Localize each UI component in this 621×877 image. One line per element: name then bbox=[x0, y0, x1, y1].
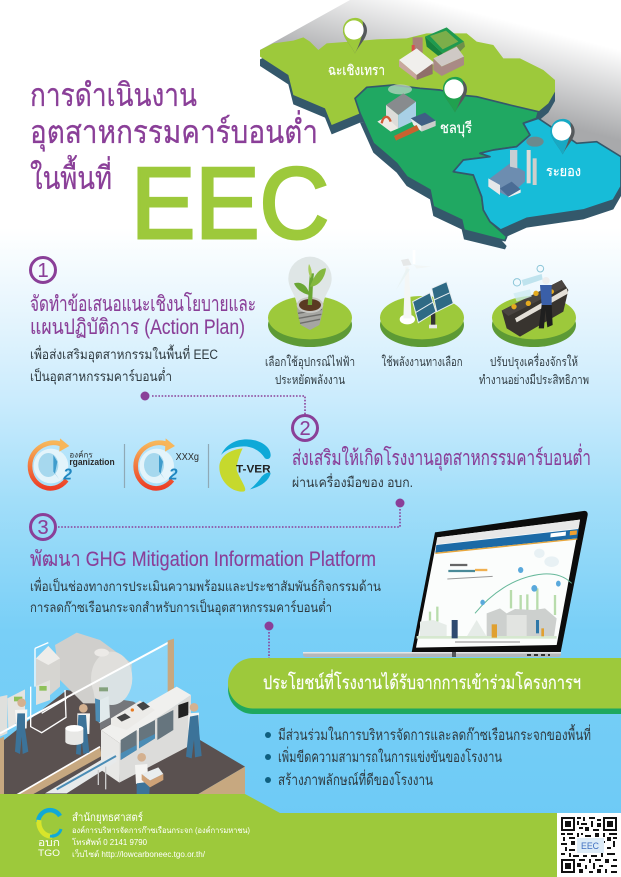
logo: T-VER: T-VER bbox=[236, 464, 271, 476]
map of EEC provinces bbox=[260, 18, 621, 249]
description 3: การลดก๊าซเรือนกระจกสำหรับการเป็นอุตสาหกรรมคาร์บอนต่ำ bbox=[30, 598, 332, 616]
description 1: เป็นอุตสาหกรรมคาร์บอนต่ำ bbox=[30, 367, 172, 385]
section 1: policy and action plan bbox=[30, 258, 256, 385]
worker right bbox=[186, 703, 202, 758]
logo: carbon footprint organization: องค์กร bbox=[69, 449, 93, 459]
title: ในพื้นที่ bbox=[30, 155, 112, 196]
title bbox=[30, 77, 329, 260]
description 2: ผ่านเครื่องมือของ อบก. bbox=[292, 473, 413, 490]
province: Chachoengsao bbox=[260, 33, 555, 125]
caption: energy saving equipment: เลือกใช้อุปกรณ์ไฟฟ้า bbox=[265, 355, 355, 370]
laptop with platform website bbox=[412, 511, 588, 652]
title: อุตสาหกรรมคาร์บอนต่ำ bbox=[30, 110, 318, 152]
icon: factory Chachoengsao bbox=[399, 27, 465, 80]
step number 1 bbox=[30, 258, 56, 282]
icon: pin Chachoengsao bbox=[343, 18, 367, 53]
caption: alternative energy: ใช้พลังงานทางเลือก bbox=[382, 355, 462, 369]
floor edge right bbox=[197, 767, 245, 795]
laptop base bbox=[303, 652, 561, 657]
icon: factory Chon Buri bbox=[377, 84, 436, 141]
benefits list bbox=[265, 724, 591, 789]
heading 3: พัฒนา GHG Mitigation Information Platform bbox=[30, 548, 376, 571]
province: Rayong bbox=[453, 118, 621, 230]
logo: carbon footprint product: 2 bbox=[168, 466, 178, 483]
benefits banner bbox=[228, 658, 621, 714]
heading 1: แผนปฏิบัติการ (Action Plan) bbox=[30, 316, 245, 339]
large tank bbox=[55, 633, 132, 705]
filling machine bbox=[101, 687, 191, 783]
section 3: information platform bbox=[30, 514, 381, 616]
TGO logo bbox=[38, 810, 61, 858]
left post bbox=[0, 737, 4, 795]
logo: carbon footprint product bbox=[136, 438, 199, 488]
QR code bbox=[557, 813, 621, 877]
step number 2 bbox=[292, 416, 318, 440]
glass partition bbox=[0, 639, 174, 795]
small tank and frame bbox=[31, 643, 67, 733]
factory interior illustration bbox=[0, 633, 245, 795]
logo: carbon footprint organization: rganization bbox=[69, 457, 115, 467]
logo: carbon footprint organization: 2 bbox=[62, 466, 72, 483]
caption: energy saving equipment bbox=[265, 355, 355, 387]
label: Rayong: ระยอง bbox=[546, 163, 581, 179]
contact details bbox=[72, 811, 250, 859]
TGO logo: TGO bbox=[38, 848, 60, 858]
contact details: เว็บไซต์ http://lowcarboneec.tgo.or.th/ bbox=[72, 849, 206, 859]
floor bbox=[0, 690, 245, 795]
description 3 bbox=[30, 577, 381, 616]
connector 1 to 2 bbox=[140, 392, 305, 414]
logo: T-VER bbox=[219, 439, 271, 492]
icon: light bulb with seedling bbox=[268, 257, 352, 347]
footer band bbox=[0, 794, 621, 877]
caption: improve machines bbox=[479, 353, 589, 387]
description 3: เพื่อเป็นช่องทางการประเมินความพร้อมและประชาสัมพันธ์กิจกรรมด้าน bbox=[30, 577, 381, 594]
title: การดำเนินงาน bbox=[30, 77, 197, 113]
step number 2: 2 bbox=[299, 418, 311, 440]
contact details: สำนักยุทธศาสตร์ bbox=[72, 811, 143, 824]
low wall bbox=[17, 747, 102, 795]
heading 1: จัดทำข้อเสนอแนะเชิงนโยบายและ bbox=[30, 292, 256, 316]
contact details: โทรศัพท์ 0 2141 9790 bbox=[72, 837, 148, 847]
conveyor belt bbox=[45, 752, 117, 793]
connector 2 to 3 bbox=[57, 498, 404, 527]
icon: efficient machinery bbox=[492, 265, 576, 347]
description 1 bbox=[30, 344, 218, 385]
description 1: เพื่อส่งเสริมอุตสาหกรรมในพื้นที่ EEC bbox=[30, 344, 218, 363]
caption: improve machines: ปรับปรุงเครื่องจักรให้ bbox=[490, 353, 578, 370]
connector 3 to benefits bbox=[264, 622, 274, 658]
icon: pin Chon Buri bbox=[443, 77, 467, 112]
benefits list: สร้างภาพลักษณ์ที่ดีของโรงงาน bbox=[278, 769, 433, 789]
caption: energy saving equipment: ประหยัดพลังงาน bbox=[275, 373, 345, 387]
worker left bbox=[15, 698, 28, 754]
map depth bbox=[260, 43, 621, 249]
section 2: factory promotion bbox=[292, 416, 591, 490]
icon: factory Rayong bbox=[488, 137, 544, 197]
logo: carbon footprint organization bbox=[30, 438, 115, 488]
benefits list: เพิ่มขีดความสามารถในการแข่งขันของโรงงาน bbox=[278, 746, 502, 766]
step number 3 bbox=[30, 514, 56, 540]
heading 1 bbox=[30, 292, 256, 339]
TGO logo: อบก bbox=[38, 838, 60, 849]
title: EEC bbox=[131, 148, 329, 260]
QR code: EEC bbox=[581, 841, 599, 851]
logo: carbon footprint product: XXXg bbox=[176, 452, 199, 463]
worker with drum bbox=[65, 704, 90, 755]
worker with crate bbox=[135, 753, 163, 795]
province: Chon Buri bbox=[355, 85, 538, 241]
label: Chachoengsao: ฉะเชิงเทรา bbox=[328, 62, 385, 78]
map shadow bbox=[260, 0, 621, 165]
icon: pin Rayong bbox=[551, 119, 575, 154]
step number 1: 1 bbox=[37, 260, 49, 282]
label: Chon Buri: ชลบุรี bbox=[440, 120, 472, 138]
step number 3: 3 bbox=[37, 517, 49, 539]
logo dividers bbox=[124, 444, 208, 488]
contact details: องค์การบริหารจัดการก๊าซเรือนกระจก (องค์การมหาชน) bbox=[72, 825, 250, 835]
caption: improve machines: ทำงานอย่างมีประสิทธิภาพ bbox=[479, 373, 589, 387]
left control panels bbox=[0, 689, 25, 737]
icon: wind turbine and solar panel bbox=[380, 250, 464, 347]
side cabinet bbox=[93, 684, 110, 723]
